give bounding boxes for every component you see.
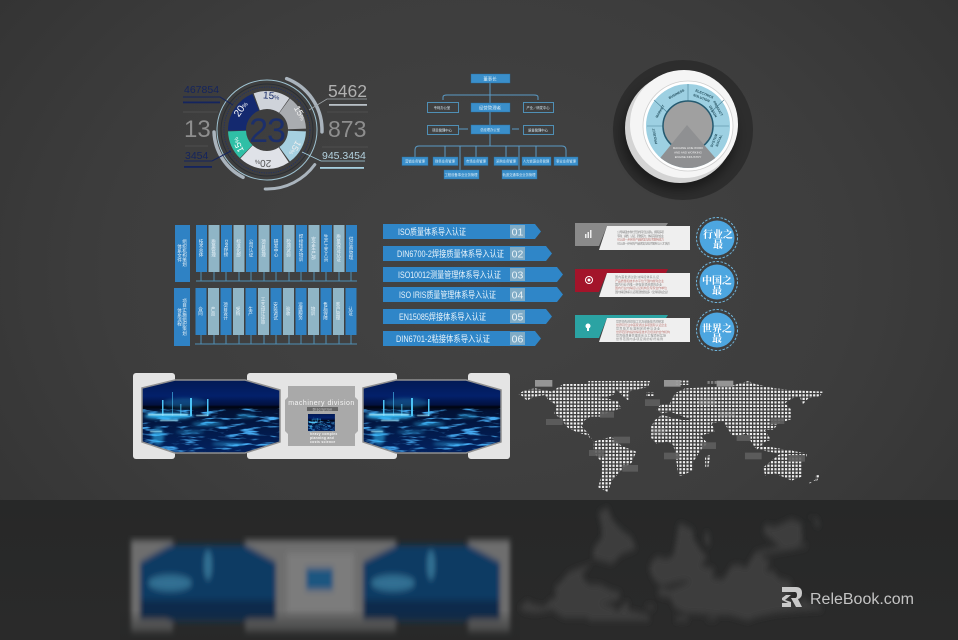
center number: 23 [249, 112, 285, 150]
ring labels: PRODUCT [712, 100, 724, 118]
card text [616, 318, 670, 341]
segment labels: 20% [232, 99, 251, 119]
row 1 text: 标准化部 [236, 238, 242, 259]
icon: chart [585, 230, 592, 238]
card text: 国内焊接体系认证项目数量最多（全球领先企业） [615, 289, 670, 294]
box labels: 经营管理者 [479, 104, 502, 112]
card text: 国内行业内唯一获得多项资质的企业 [615, 282, 662, 286]
row 2 text: 培训 [310, 305, 316, 317]
center plaque [285, 386, 358, 446]
center plaque: planning and [310, 436, 334, 440]
left labels: 13 [184, 116, 211, 143]
badge: industry: 最 [713, 238, 723, 251]
item 01 [383, 224, 541, 239]
item 03: ISO10012测量管理体系导入认证 [398, 269, 501, 280]
item 02: DIN6700-2焊接质量体系导入认证 [397, 248, 504, 259]
process bars [174, 225, 357, 346]
row 2 text: 认证 [348, 305, 354, 317]
row 1 text: 体系文件 [177, 243, 182, 264]
row 2 text: 项目设计 [223, 302, 228, 322]
inner dark ring and gray core [663, 101, 713, 151]
card text [617, 229, 670, 246]
box labels: 市场业务管理 [466, 158, 487, 164]
blue boxes [402, 74, 578, 179]
card: china [575, 269, 690, 297]
card text: 世界同行业中首家通过多项国际认证企业 [616, 322, 667, 327]
row 1 text: 研发中心 [273, 239, 279, 258]
item 04: ISO IRIS质量管理体系导入认证 [399, 289, 496, 300]
icon: target [586, 276, 592, 284]
badge: industry: 行业之 [703, 228, 733, 241]
box labels: 专利办公室 [434, 105, 451, 110]
ring labels: SOLUTION [692, 93, 711, 103]
watermark [782, 587, 914, 608]
reflection fade [120, 610, 520, 640]
box labels: 事业业务管理 [556, 158, 577, 164]
row 2 text: 安装调试 [273, 301, 278, 322]
card text: 可以进一步完善产品研发与技术服务与人才培养 [617, 240, 670, 246]
left labels: 3454 [185, 150, 209, 162]
ring labels [651, 88, 724, 148]
item 03: 03 [512, 270, 523, 282]
card text: 专利、资质、认证、研发实力、体系完善的企业 [617, 233, 664, 238]
superlative cards [575, 218, 738, 350]
box labels: 董事长 [483, 76, 497, 82]
ring labels: BUSINESS [668, 88, 686, 100]
map reflection [518, 508, 823, 621]
ring labels: ELECTRICS [695, 89, 715, 100]
left labels: 467854 [184, 84, 219, 96]
row 2 text: 验收 [285, 305, 291, 317]
row 1 text: 质量保证认证 [336, 233, 342, 263]
box labels: 质量管理中心 [528, 128, 549, 132]
right labels: 873 [328, 116, 366, 142]
segment labels: 20% [254, 157, 271, 168]
row 1 text: DIN焊接 [223, 239, 229, 258]
ring labels: SYSTEM [710, 133, 719, 148]
reflected photos [140, 545, 500, 622]
card text: 世界技术标准制定的参与企业 [616, 326, 660, 330]
row 2 bars [196, 288, 356, 335]
item 05: EN15085焊接体系导入认证 [399, 311, 486, 322]
box labels: 轨道交通事业业务管理 [503, 172, 536, 177]
card text: 世界范围内多项应用的标杆案例 [616, 336, 663, 341]
row 2 text: 客户管理 [335, 301, 341, 321]
row 2 text: 体系流程 [177, 307, 182, 328]
ring labels: MARKET [655, 103, 666, 119]
item 02 [383, 246, 552, 261]
card: industry [575, 223, 690, 250]
box labels: 人力资源业务管理 [523, 158, 550, 164]
center plaque: costs science [310, 440, 336, 444]
box labels: 项目管理中心 [432, 128, 453, 132]
center plaque: machinery division [288, 400, 355, 407]
box labels: 营销业务管理 [405, 158, 426, 164]
connectors [415, 83, 566, 170]
row 1 text: 供应商管理 [348, 236, 354, 260]
row 1 bars [196, 225, 357, 272]
row 2 text [177, 297, 354, 336]
blue ring [646, 84, 730, 168]
card text: 可以进一步完善产品研发与技术服务能力 [617, 236, 664, 242]
panel frame [133, 373, 510, 459]
item 01: ISO质量体系导入认证 [398, 226, 466, 237]
item 06 [383, 331, 541, 346]
right photo [363, 380, 501, 453]
badge: industry [696, 218, 738, 258]
row 1 text: 项目管理 [261, 239, 266, 258]
segment labels: 15% [230, 135, 246, 154]
item 03 [383, 267, 563, 282]
row 2 text: 采购 [235, 305, 241, 317]
badge: world: 最 [712, 332, 722, 345]
card text: 公司焊接技术处于国内同行业领先，拥有多项 [617, 229, 664, 234]
badge: world [696, 310, 738, 350]
ring labels: DESIGN [708, 105, 718, 119]
row 1 text: 质量管理 [211, 238, 216, 258]
machinery panel [133, 373, 510, 459]
segment labels: 15% [292, 104, 308, 123]
row 1 text: 焊接技术培训 [298, 233, 304, 263]
center plaque: heavy complex [310, 432, 338, 436]
row 1 text: 安全生产部 [311, 236, 316, 261]
row 2 text: 生产 [248, 305, 254, 317]
right labels: 945.3454 [322, 150, 366, 162]
badge: china [696, 262, 738, 302]
box labels: 财务业务管理 [435, 158, 456, 164]
row 2 text: 合同 [198, 305, 204, 317]
card text: 世界范围内提供焊接技术及培训的合作机构 [616, 329, 670, 334]
item 04: 04 [512, 290, 523, 302]
outer gauge arcs [208, 71, 326, 189]
box labels [405, 76, 577, 177]
panel reflection [131, 540, 510, 633]
card text: 产品质量和技术水平位于国内前列企业 [615, 278, 664, 283]
center plaque: Discription [313, 407, 332, 411]
item 04 [383, 287, 563, 302]
segment labels: 15% [287, 139, 303, 158]
org chart [402, 74, 578, 179]
box labels: 工程设备事业业务管理 [445, 172, 478, 177]
right labels [302, 81, 368, 169]
row 2 text: 产品 [210, 305, 216, 317]
card text: 世界领先的焊接工艺及装备技术的研发 [616, 318, 664, 324]
row 2 rail [195, 335, 357, 344]
card text: 国内行业内焊接认证机构及专家合作单位 [615, 285, 667, 290]
item 06: 06 [512, 334, 523, 346]
row 2 text: 项目实施组织策划 [182, 299, 188, 336]
ring labels: PROJECT [651, 127, 658, 144]
card text: 世界级质量管理体系与工程项目实施 [616, 332, 666, 338]
map tags [535, 380, 805, 472]
triangle caption: MACHINE LINE WORK [673, 146, 703, 150]
row 1 rail [196, 272, 357, 281]
box labels: 产业／研发中心 [526, 105, 550, 110]
item 06: DIN6701-2粘接体系导入认证 [396, 333, 490, 344]
row 2 text: 运维服务 [298, 301, 304, 322]
card text: 国内首批通过欧洲焊接体系认证 [615, 274, 659, 279]
radial dividers [647, 84, 729, 126]
row 1 text: 公司认证 [248, 239, 254, 259]
segment labels [230, 90, 308, 168]
card text [615, 274, 670, 294]
certification list [383, 224, 563, 346]
row 1 header [175, 225, 190, 282]
icon: bulb [586, 324, 590, 331]
white stacked discs [622, 80, 736, 190]
badge: china: 中国之 [702, 274, 732, 287]
row 2 text: 售后保障 [323, 301, 328, 322]
triangle caption [673, 146, 703, 159]
triangle caption: AND AND WORKING [674, 150, 703, 154]
row 1 text: 生产工艺人员 [323, 233, 329, 263]
ring labels: SOCIAL [715, 134, 723, 147]
gray triangle sector [660, 126, 716, 168]
logo [782, 587, 802, 607]
dark base disc [613, 60, 753, 200]
box labels: 总经理办公室 [480, 127, 501, 132]
donut dashboard [183, 71, 368, 189]
dotted world map [515, 375, 825, 495]
circular diagram [613, 60, 753, 200]
row 1 text: 技术总体 [198, 238, 204, 259]
left photo [142, 380, 280, 453]
donut segments [237, 100, 297, 160]
box labels: 采购业务管理 [496, 158, 517, 164]
row 2 text: 工艺设计评审 [260, 297, 266, 326]
segment labels: 15% [263, 90, 281, 103]
card: world [575, 315, 690, 342]
row 2 header [174, 288, 190, 346]
badge: world: 世界之 [702, 322, 732, 335]
row 1 text: 组织机构策划 [182, 238, 188, 267]
left labels [183, 84, 233, 168]
item 05 [383, 309, 552, 324]
item 05: 05 [512, 312, 523, 324]
triangle caption: ENGINE INDUSTRY [675, 155, 701, 159]
mini photo [308, 414, 335, 431]
background [0, 0, 958, 500]
row 1 text [177, 233, 354, 267]
item 01: 01 [512, 226, 523, 238]
outline boxes [428, 102, 554, 134]
right labels: 5462 [328, 81, 367, 101]
reflected plaque [287, 553, 354, 613]
row 1 text: 检测试验 [286, 238, 292, 259]
badge: china: 最 [712, 284, 722, 297]
reflective floor [0, 500, 958, 640]
item 02: 02 [512, 248, 523, 260]
watermark: ReleBook.com [810, 591, 914, 608]
